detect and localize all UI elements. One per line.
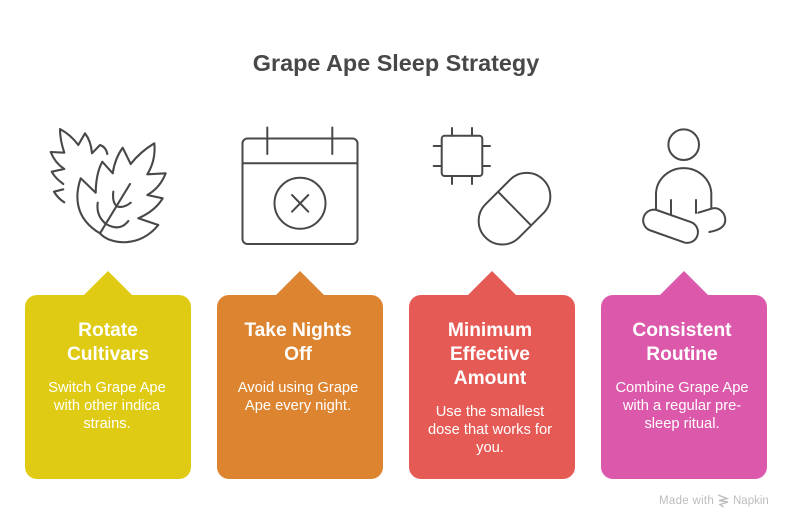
panel: minimum effective amount — [409, 271, 575, 479]
heading: minimum effective amount: Minimum — [448, 320, 532, 341]
footer: made with napkin — [659, 494, 769, 508]
text: rotate cultivars: Switch Grape Ape — [48, 380, 166, 396]
text: consistent routine: sleep ritual. — [644, 416, 720, 432]
heading: minimum effective amount — [448, 320, 532, 389]
heading: minimum effective amount: Amount — [454, 368, 526, 389]
text: minimum effective amount: you. — [476, 440, 504, 456]
heading: consistent routine: Routine — [646, 344, 718, 365]
text: consistent routine — [615, 380, 749, 432]
text: minimum effective amount: Use the smallest — [436, 404, 544, 420]
panel: take nights off — [217, 271, 383, 479]
footer: made with napkin: Napkin — [733, 495, 769, 507]
text: rotate cultivars: strains. — [83, 416, 131, 432]
heading: take nights off — [244, 320, 352, 365]
text: take nights off — [238, 380, 358, 414]
text: consistent routine: Combine Grape Ape — [615, 380, 749, 396]
title: Grape Ape Sleep Strategy — [253, 50, 539, 76]
heading: rotate cultivars: Cultivars — [67, 344, 149, 365]
panel: rotate cultivars — [25, 271, 191, 479]
heading: rotate cultivars — [67, 320, 149, 365]
icon: chip and pill — [432, 127, 552, 246]
text: take nights off: Avoid using Grape — [238, 380, 358, 396]
icon: leaves — [50, 128, 167, 244]
panel: consistent routine — [601, 271, 767, 479]
heading: rotate cultivars: Rotate — [78, 320, 138, 341]
heading: consistent routine — [632, 320, 732, 365]
text: minimum effective amount — [428, 404, 552, 456]
icon: calendar with cross — [241, 126, 359, 245]
icon: seated person — [642, 128, 726, 244]
text: take nights off: Ape every night. — [245, 398, 351, 414]
text: rotate cultivars — [48, 380, 166, 432]
heading: take nights off: Take Nights — [244, 320, 352, 341]
text: rotate cultivars: with other indica — [54, 398, 160, 414]
text: minimum effective amount: dose that works for — [428, 422, 552, 438]
heading: take nights off: Off — [284, 344, 312, 365]
text: consistent routine: with a regular pre- — [623, 398, 741, 414]
heading: minimum effective amount: Effective — [450, 344, 530, 365]
footer: made with napkin: Made with — [659, 495, 714, 507]
heading: consistent routine: Consistent — [632, 320, 732, 341]
